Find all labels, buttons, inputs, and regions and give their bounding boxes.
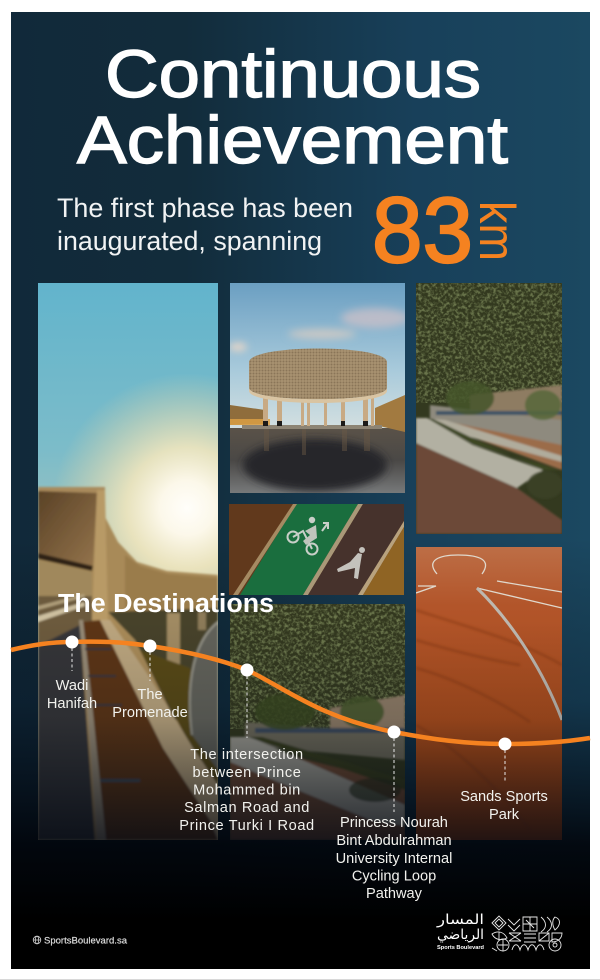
label: The Promenade: The bbox=[137, 687, 163, 703]
logo: Sports Boulevard bbox=[436, 912, 562, 951]
subtitle text: inaugurated, spanning bbox=[57, 226, 322, 256]
label: Princess Nourah: Princess Nourah bbox=[340, 815, 448, 831]
heading: The Destinations: The Destinations bbox=[58, 590, 274, 618]
icon: pedestrian bbox=[337, 547, 365, 579]
title: Continuous bbox=[105, 37, 481, 112]
label: Princess Nourah: Pathway bbox=[366, 886, 423, 902]
photo: pavilion over water bbox=[229, 283, 409, 493]
logo: Sports Boulevard: المسار bbox=[436, 912, 484, 928]
label: The intersection: Salman Road and bbox=[184, 800, 310, 816]
stat: 83 km: km bbox=[469, 201, 525, 261]
route line with stops bbox=[11, 636, 590, 812]
label: Princess Nourah: Bint Abdulrahman bbox=[336, 833, 452, 849]
label: The intersection: The intersection bbox=[190, 747, 304, 763]
photo bottom fade overlay bbox=[38, 620, 562, 840]
title: Achievement bbox=[77, 103, 508, 178]
logo: Sports Boulevard: الرياضي bbox=[437, 927, 484, 943]
label: The intersection: Mohammed bin bbox=[193, 782, 301, 798]
footer website: SportsBoulevard.sa bbox=[44, 936, 128, 946]
label: The intersection: Prince Turki I Road bbox=[179, 818, 315, 834]
title bbox=[77, 37, 508, 178]
subtitle text: The first phase has been bbox=[57, 193, 353, 223]
label: Princess Nourah: Cycling Loop bbox=[352, 868, 436, 884]
label: Sands Sports Park: Park bbox=[489, 807, 520, 823]
photo: sands sports park bbox=[416, 547, 562, 840]
label: The intersection: between Prince bbox=[192, 765, 302, 781]
stat: 83 km bbox=[372, 178, 525, 282]
photo: bike and pedestrian lanes bbox=[229, 504, 404, 595]
label: The Promenade: Promenade bbox=[112, 705, 188, 721]
label: Princess Nourah: University Internal bbox=[336, 851, 452, 867]
photo: park trees and walkway bbox=[416, 283, 563, 534]
stat: 83 km: 83 bbox=[372, 178, 473, 282]
subtitle text bbox=[57, 193, 353, 256]
label: Sands Sports Park: Sands Sports bbox=[460, 789, 548, 805]
label: Wadi Hanifah: Wadi bbox=[56, 678, 88, 694]
icon: cyclist bbox=[288, 517, 328, 554]
photo: tree-lined path with overlay bbox=[230, 604, 405, 840]
label: Wadi Hanifah: Hanifah bbox=[47, 696, 97, 712]
logo: Sports Boulevard: Sports Boulevard bbox=[437, 945, 484, 951]
photo: sunset overpass bbox=[38, 283, 218, 840]
